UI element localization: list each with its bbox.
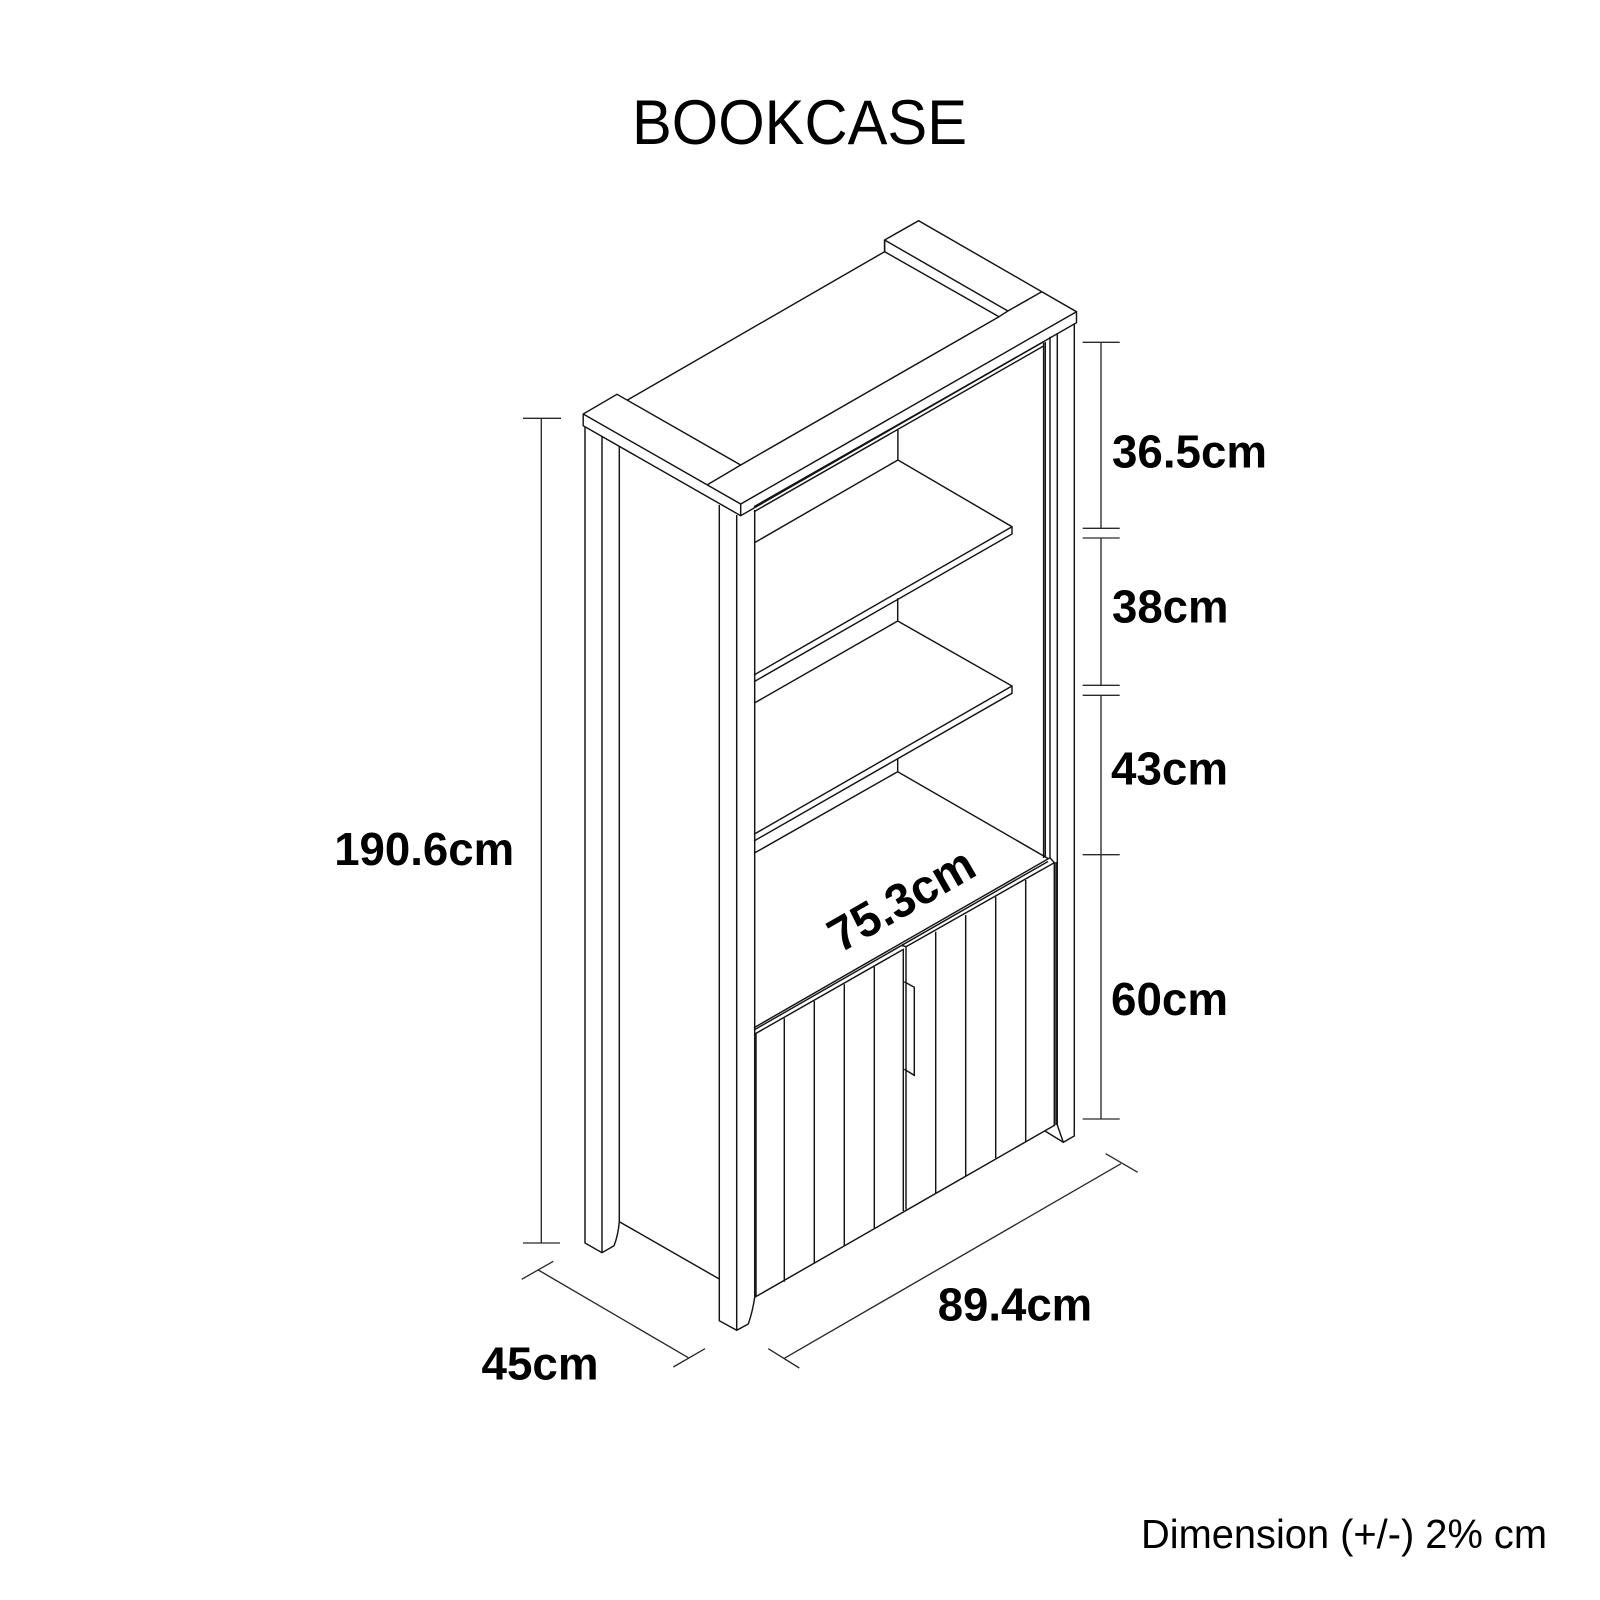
left cabinet door: [756, 950, 903, 1297]
dimension: cabinet height: [1083, 855, 1120, 1119]
title: BOOKCASE: [632, 88, 967, 158]
dimension: middle compartment: [1083, 538, 1120, 685]
label: cabinet height: 60cm: [1111, 973, 1228, 1025]
left rear post: [585, 427, 719, 1279]
upper shelf: [754, 430, 1012, 682]
top rail under top panel: [754, 342, 1044, 512]
dimension: lower compartment: [1083, 695, 1120, 855]
door handle: [904, 982, 914, 1075]
label: width: 89.4cm: [938, 1279, 1092, 1331]
footnote: Dimension (+/-) 2% cm: [1141, 1511, 1547, 1557]
cabinet top surface: [754, 759, 1054, 1034]
right post: [1044, 324, 1074, 1142]
label: depth: 45cm: [482, 1337, 598, 1389]
label: total height: 190.6cm: [334, 823, 514, 875]
label: inner width: 75.3cm: [819, 838, 984, 963]
dimension: upper compartment: [1083, 342, 1120, 528]
label: middle compartment: 38cm: [1112, 580, 1228, 632]
dimension: total height: [523, 418, 561, 1243]
label: lower compartment: 43cm: [1111, 742, 1228, 794]
bookcase top panel: [583, 221, 1076, 516]
right cabinet door: [755, 862, 1056, 1297]
front post: [719, 505, 755, 1330]
middle shelf: [754, 598, 1012, 841]
label: upper compartment: 36.5cm: [1112, 426, 1267, 478]
dimension: width: [768, 1154, 1138, 1368]
dimension: depth: [522, 1261, 705, 1367]
bookcase drawing: [583, 221, 1076, 1330]
